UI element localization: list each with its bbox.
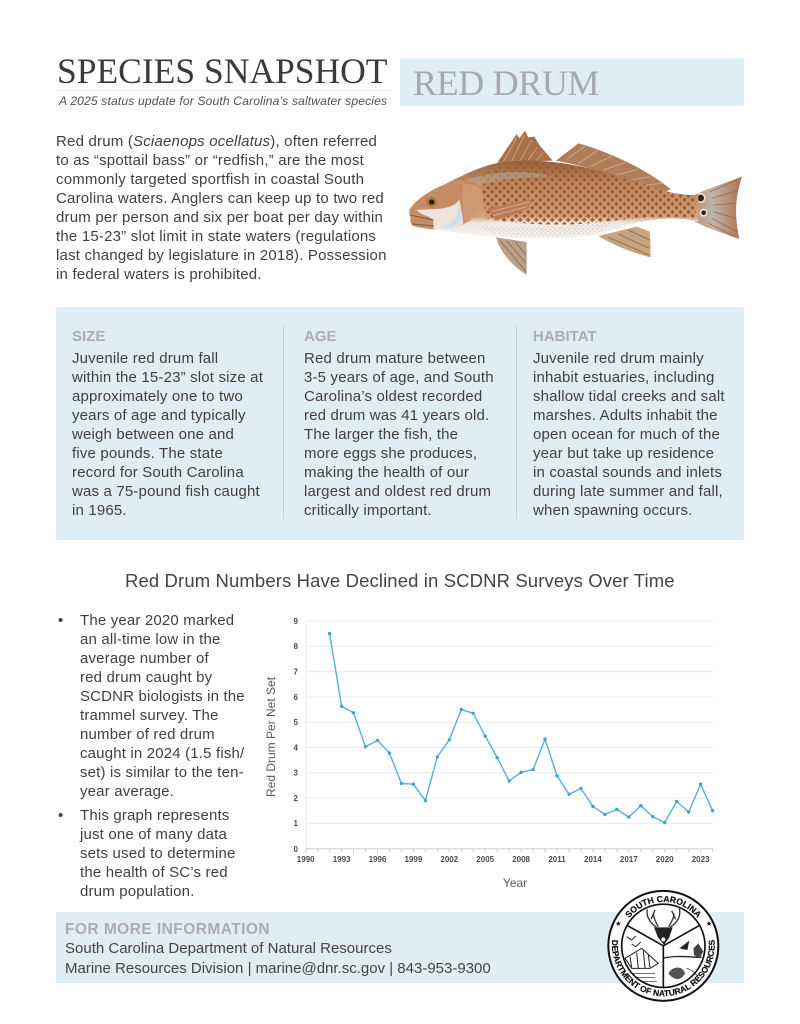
age text: more eggs she produces,	[304, 445, 477, 462]
age text: largest and oldest red drum	[304, 483, 491, 500]
x axis title: Year	[503, 876, 527, 890]
habitat text: in coastal sounds and inlets	[533, 464, 722, 481]
seal stars: ★	[615, 919, 622, 928]
habitat text: marshes. Adults inhabit the	[533, 407, 718, 424]
bullet list: just one of many data	[80, 826, 227, 843]
x axis labels: 2008	[512, 855, 531, 864]
bullet list: an all-time low in the	[80, 631, 220, 648]
data line	[330, 634, 713, 823]
size text: within the 15-23” slot size at	[72, 369, 263, 386]
species name banner	[400, 58, 744, 106]
bullet list: year average.	[80, 783, 174, 800]
y axis labels: 4	[294, 744, 299, 752]
body	[409, 161, 698, 238]
tail fin	[693, 177, 742, 239]
x axis labels: 2023	[692, 855, 710, 864]
species name: RED DRUM	[413, 63, 599, 103]
pectoral fin	[488, 198, 533, 221]
scale pattern	[478, 160, 697, 227]
panel: size, age, habitat	[56, 307, 744, 540]
bullet list: sets used to determine	[80, 845, 236, 862]
x axis labels: 1999	[405, 855, 423, 864]
intro text: commonly targeted sportfish in coastal South	[56, 171, 364, 188]
size text: was a 75-pound fish caught	[72, 483, 260, 500]
size text: years of age and typically	[72, 407, 246, 424]
age text: The larger the fish, the	[304, 426, 458, 443]
age text: red drum was 41 years old.	[304, 407, 489, 424]
habitat text	[533, 350, 725, 519]
bullet list: •	[58, 612, 63, 629]
y axis title: Red Drum Per Net Set	[264, 676, 278, 797]
x axis labels: 1990	[297, 855, 315, 864]
icon: SCDNR seal: ★	[706, 919, 713, 928]
belly stipple	[478, 222, 612, 236]
footer contact text: Marine Resources Division | marine@dnr.sc.gov | 843-953-9300	[65, 960, 491, 977]
bullet two	[58, 807, 236, 900]
icon: SCDNR seal	[607, 890, 720, 1002]
y axis labels: 5	[294, 718, 299, 727]
y axis labels	[294, 617, 299, 854]
footer heading: FOR MORE INFORMATION	[65, 921, 270, 938]
x axis labels	[297, 855, 710, 864]
panel: for more information	[56, 912, 744, 983]
size text: record for South Carolina	[72, 464, 244, 481]
intro text	[56, 133, 387, 283]
age text: 3-5 years of age, and South	[304, 369, 494, 386]
bullet list	[58, 612, 245, 900]
size text: approximately one to two	[72, 388, 243, 405]
bullet list: caught in 2024 (1.5 fish/	[80, 745, 244, 762]
x axis labels: 2020	[656, 855, 674, 864]
seal top text: SOUTH CAROLINA	[626, 896, 700, 918]
x axis labels: 1993	[333, 855, 351, 864]
data markers	[328, 632, 714, 824]
y axis labels: 3	[294, 768, 299, 778]
subtitle: A 2025 status update for South Carolina’s saltwater species	[59, 94, 387, 108]
y axis labels: 2	[294, 794, 299, 803]
intro text: to as “spottail bass” or “redfish,” are the most	[56, 152, 364, 169]
habitat text: when spawning occurs.	[533, 502, 692, 519]
seal spokes	[627, 925, 700, 987]
bullet list: SCDNR biologists in the	[80, 688, 245, 705]
bullet list: •	[58, 807, 63, 824]
seal bottom text: DEPARTMENT OF NATURAL RESOURCES	[612, 940, 715, 996]
habitat text: Juvenile red drum mainly	[533, 350, 704, 367]
x axis labels: 2011	[548, 855, 566, 864]
head	[409, 181, 483, 229]
intro text: Red drum (Sciaenops ocellatus), often referred	[56, 133, 377, 150]
back sheen	[467, 172, 553, 185]
bullet one	[58, 612, 245, 800]
intro text: Carolina waters. Anglers can keep up to two red	[56, 190, 384, 207]
y axis labels: 7	[294, 668, 299, 676]
intro text: last changed by legislature in 2018). Possession	[56, 247, 387, 264]
soft dorsal fin	[556, 143, 671, 192]
divider	[516, 326, 517, 519]
size text: five pounds. The state	[72, 445, 223, 462]
age text: critically important.	[304, 502, 432, 519]
age text: Red drum mature between	[304, 350, 486, 367]
title: SPECIES SNAPSHOT	[57, 51, 387, 91]
intro text: in federal waters is prohibited.	[56, 266, 262, 283]
habitat heading: HABITAT	[533, 328, 597, 345]
habitat text: shallow tidal creeks and salt	[533, 388, 725, 405]
size text: Juvenile red drum fall	[72, 350, 218, 367]
seal birds and boat net	[625, 936, 658, 981]
bullet list: The year 2020 marked	[80, 612, 234, 629]
bullet list: drum population.	[80, 883, 194, 900]
age text: making the health of our	[304, 464, 469, 481]
size text	[72, 350, 263, 519]
ventral fin	[496, 237, 527, 275]
age heading: AGE	[304, 328, 337, 345]
y axis labels: 8	[294, 642, 299, 651]
bullet list: set) is similar to the ten-	[80, 764, 244, 781]
x axis labels: 1996	[369, 855, 387, 864]
age text: Carolina’s oldest recorded	[304, 388, 482, 405]
y axis labels: 6	[294, 693, 299, 702]
bullet list: number of red drum	[80, 726, 215, 743]
habitat text: inhabit estuaries, including	[533, 369, 715, 386]
spiny dorsal fin	[497, 131, 553, 163]
intro text: drum per person and six per boat per day within	[56, 209, 383, 226]
chart title: Red Drum Numbers Have Declined in SCDNR Surveys Over Time	[125, 570, 675, 591]
bullet list: average number of	[80, 650, 209, 667]
icon: red drum fish illustration	[409, 130, 742, 275]
footer contact text: South Carolina Department of Natural Resources	[65, 940, 392, 957]
habitat text: year but take up residence	[533, 445, 714, 462]
bullet list: trammel survey. The	[80, 707, 219, 724]
x axis labels: 2017	[620, 855, 638, 864]
seal landscape and fish	[664, 941, 703, 979]
divider	[283, 326, 284, 519]
size heading: SIZE	[72, 328, 105, 345]
title underline	[57, 90, 390, 91]
y axis labels: 0	[294, 845, 299, 854]
y axis labels: 1	[294, 819, 299, 828]
bullet list: the health of SC’s red	[80, 864, 228, 881]
x axis labels: 2002	[440, 855, 459, 864]
bullet list: red drum caught by	[80, 669, 212, 686]
size text: in 1965.	[72, 502, 127, 519]
size text: weigh between one and	[72, 426, 234, 443]
x axis labels: 2005	[476, 855, 495, 864]
footer contact text	[65, 940, 491, 977]
age text	[304, 350, 494, 519]
bullet list: This graph represents	[80, 807, 229, 824]
anal fin	[598, 227, 651, 257]
x axis labels: 2014	[584, 855, 602, 864]
y axis labels: 9	[294, 617, 299, 626]
habitat text: during late summer and fall,	[533, 483, 723, 500]
habitat text: open ocean for much of the	[533, 426, 720, 443]
intro text: the 15-23” slot limit in state waters (regulations	[56, 228, 376, 245]
seal deer	[647, 908, 680, 945]
